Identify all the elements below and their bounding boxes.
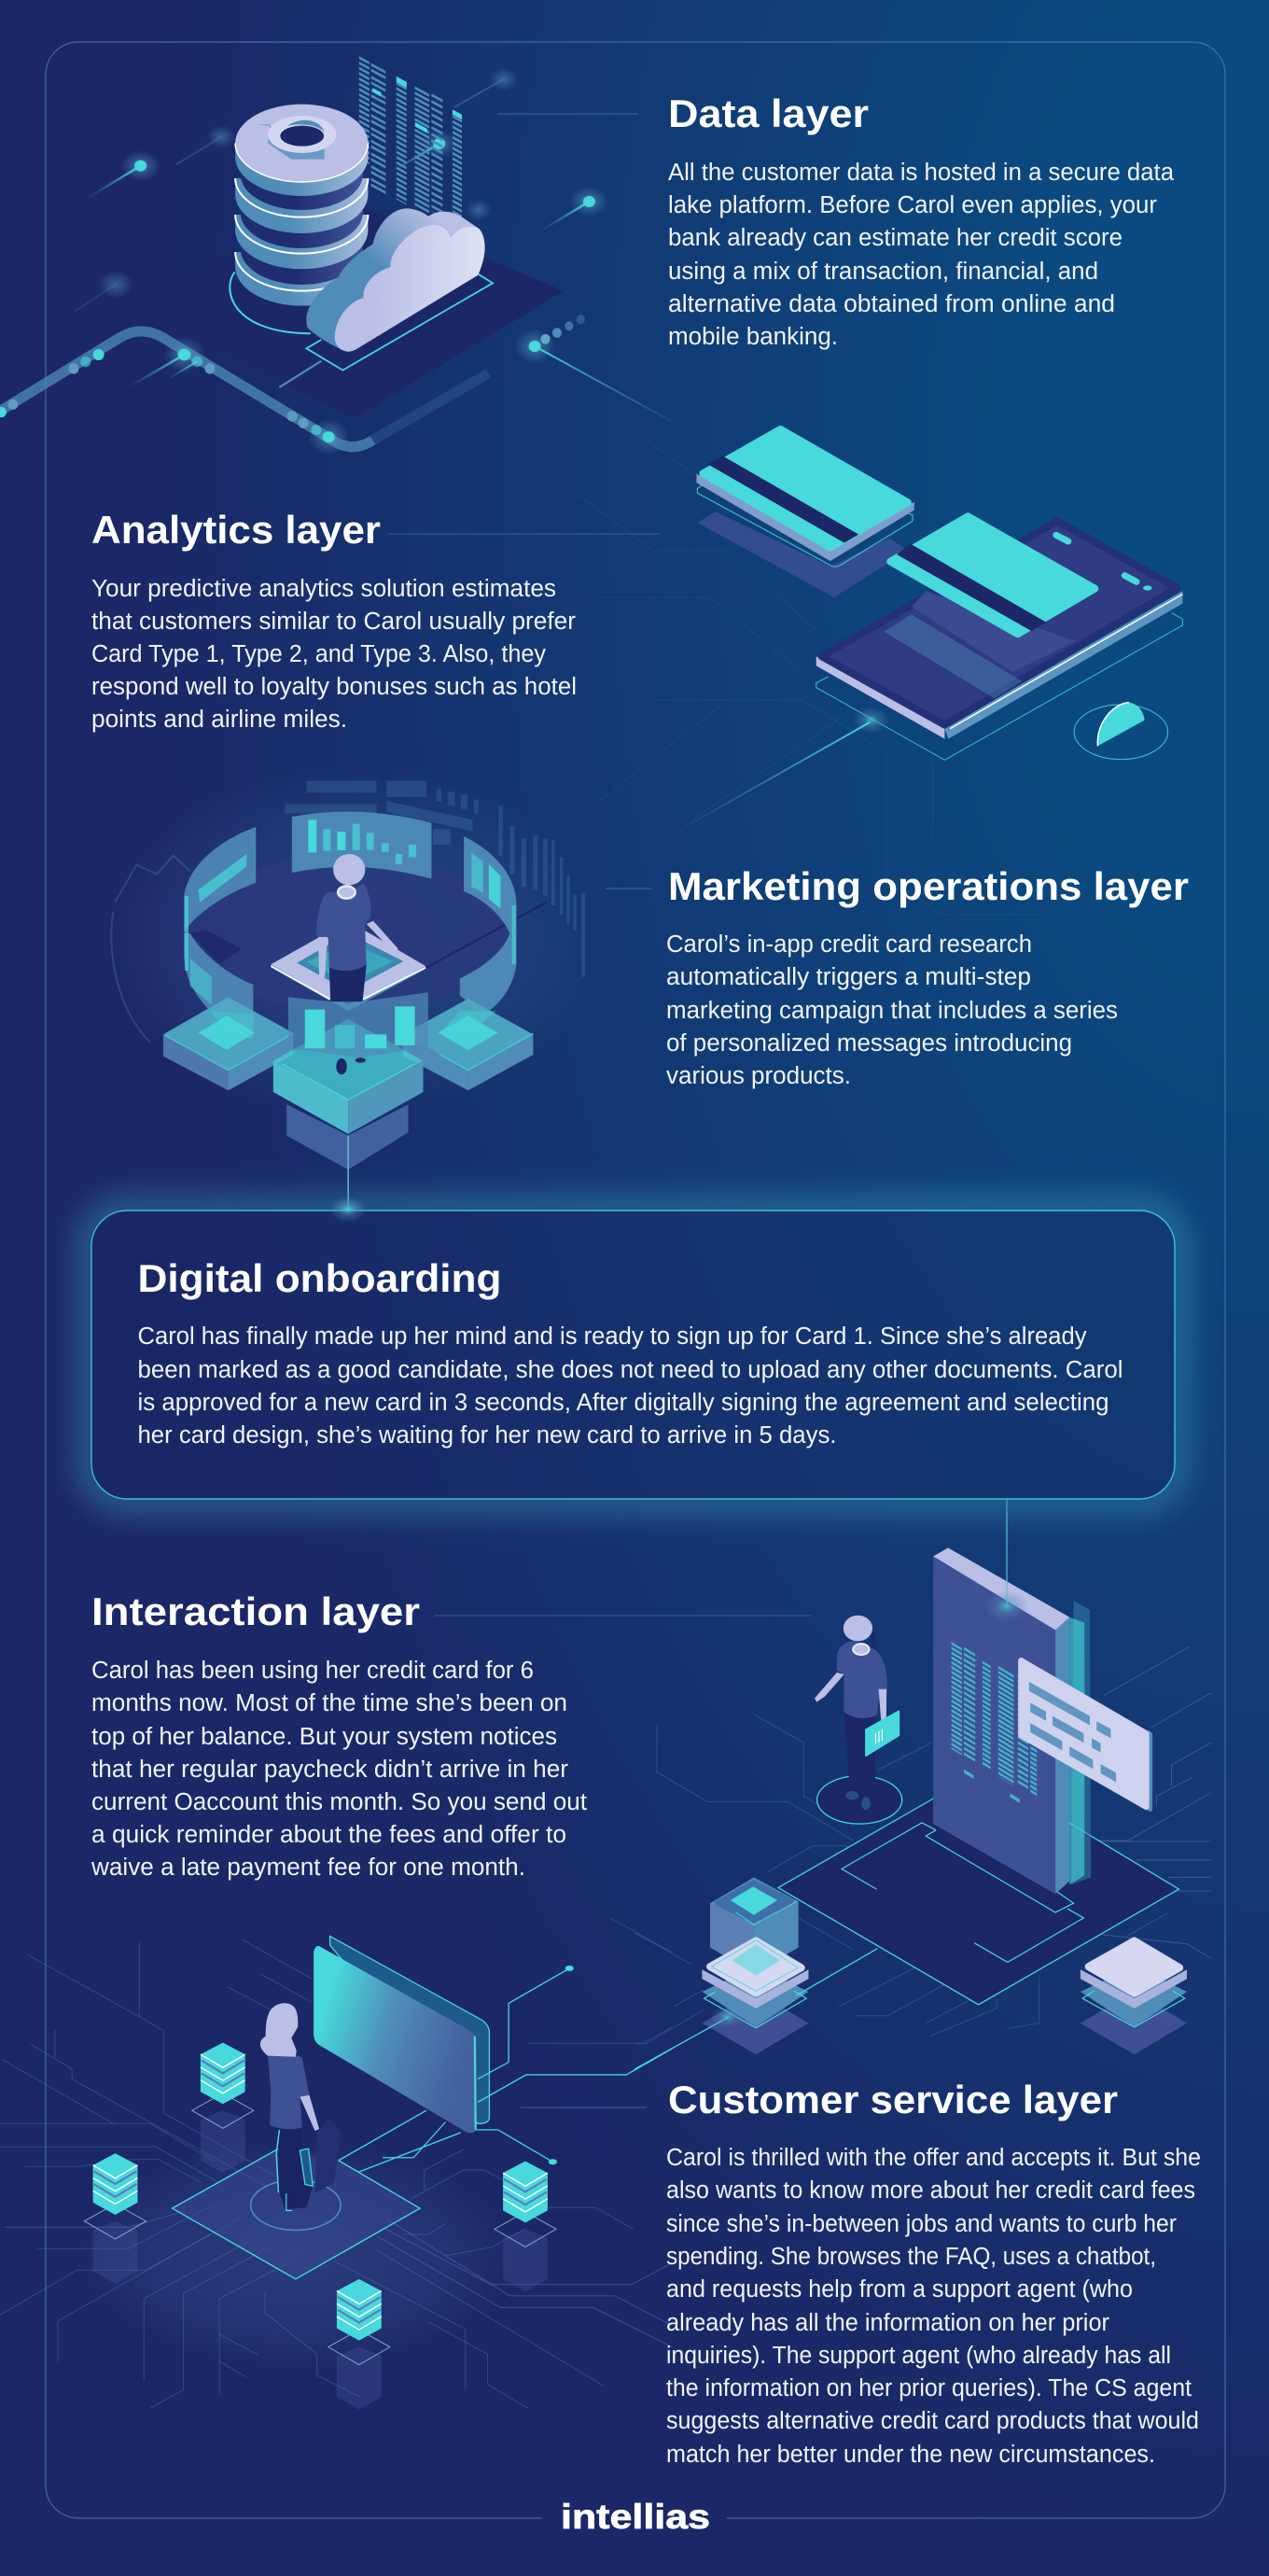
text block: Marketing operations layer [666, 931, 1118, 1089]
person at screen [260, 2003, 341, 2210]
text block: Customer service layer: Carol is thrilled with the offer and accepts it. But she [666, 2145, 1201, 2171]
text block: Customer service layer [666, 2145, 1201, 2468]
text block: Digital onboarding: her card design, she’s waiting for her new card to arrive in 5 days. [138, 1422, 836, 1449]
illustration: customer service figure, screen and stacks [0, 1918, 672, 2410]
panel: digital onboarding [91, 1211, 1175, 1499]
text block: Analytics layer: that customers similar to Carol usually prefer [91, 609, 577, 635]
data stack: back [192, 2042, 254, 2173]
streak from phone glow [672, 722, 870, 834]
data stack: right [495, 2162, 556, 2291]
connector: interaction heading line [435, 1615, 811, 1617]
text block: Data layer [668, 160, 1175, 350]
text block: Data layer: mobile banking. [668, 324, 838, 350]
text block: Interaction layer: Carol has been using her credit card for 6 [91, 1658, 534, 1684]
text block: Interaction layer: that her regular paycheck didn’t arrive in her [91, 1757, 569, 1783]
text block: Customer service layer: suggests alternative credit card products that would [666, 2408, 1199, 2434]
text block: Interaction layer: a quick reminder about the fees and offer to [91, 1822, 566, 1848]
text block: Data layer: bank already can estimate her credit score [668, 225, 1123, 251]
text block: Customer service layer: already has all the information on her prior [666, 2310, 1109, 2336]
text block: Digital onboarding [138, 1323, 1123, 1449]
text block: Interaction layer: months now. Most of the time she’s been on [91, 1690, 567, 1716]
connector: analytics heading line [387, 533, 660, 535]
connector: marketing heading line [606, 888, 652, 889]
text block: Digital onboarding: is approved for a new card in 3 seconds, After digitally signing the agreement and selecting [138, 1390, 1109, 1416]
heading: Marketing operations layer: Marketing operations layer [668, 864, 1189, 908]
text block: Digital onboarding: Carol has finally made up her mind and is ready to sign up for Card 1. Since she’s already [138, 1323, 1087, 1350]
text block: Analytics layer [91, 576, 577, 733]
illustration: credit cards and phone [697, 429, 1182, 760]
connector: customer service heading line [521, 2107, 647, 2108]
text block: Interaction layer: current Oaccount this month. So you send out [91, 1789, 587, 1815]
text block: Marketing operations layer: of personalized messages introducing [666, 1030, 1072, 1057]
text block: Marketing operations layer: various products. [666, 1063, 851, 1089]
text block: Data layer: All the customer data is hosted in a secure data [668, 160, 1175, 186]
heading: Data layer: Data layer [668, 91, 869, 135]
text block: Analytics layer: points and airline miles. [91, 707, 347, 733]
text block: Data layer: using a mix of transaction, financial, and [668, 259, 1098, 285]
text block: Customer service layer: also wants to know more about her credit card fees [666, 2177, 1195, 2204]
data stack: left [84, 2153, 146, 2284]
text block: Customer service layer: since she’s in-between jobs and wants to curb her [666, 2211, 1177, 2237]
text block: Data layer: alternative data obtained from online and [668, 291, 1115, 317]
text block: Data layer: lake platform. Before Carol even applies, your [668, 192, 1158, 218]
text block: Customer service layer: spending. She browses the FAQ, uses a chatbot, [666, 2244, 1156, 2270]
data stack: front [328, 2279, 390, 2410]
text block: Marketing operations layer: marketing campaign that includes a series [666, 998, 1118, 1024]
heading: Customer service layer: Customer service layer [668, 2078, 1118, 2121]
heading: Interaction layer: Interaction layer [91, 1589, 420, 1633]
text block: Marketing operations layer: automatically triggers a multi-step [666, 964, 1031, 990]
heading: Digital onboarding: Digital onboarding [138, 1256, 502, 1300]
text block: Interaction layer [91, 1658, 587, 1881]
text block: Customer service layer: and requests help from a support agent (who [666, 2276, 1133, 2303]
text block: Customer service layer: match her better under the new circumstances. [666, 2442, 1155, 2468]
text block: Analytics layer: respond well to loyalty bonuses such as hotel [91, 674, 577, 700]
illustration: interaction layer phone, person and cubes [634, 1512, 1211, 2069]
heading: Analytics layer: Analytics layer [91, 508, 381, 552]
logo: intellias: intellias [561, 2498, 710, 2536]
connector: onboarding to phone [1006, 1499, 1008, 1607]
text block: Analytics layer: Card Type 1, Type 2, and Type 3. Also, they [91, 641, 546, 667]
text block: Analytics layer: Your predictive analytics solution estimates [91, 576, 556, 602]
faint circuit lines behind phone [579, 439, 1045, 915]
text block: Digital onboarding: been marked as a good candidate, she does not need to upload any other documents. Carol [138, 1357, 1123, 1383]
connector: data layer heading line [497, 113, 638, 115]
illustration: database and cloud [0, 57, 672, 455]
glow: connector node on onboarding panel [329, 1197, 367, 1223]
text block: Interaction layer: waive a late payment fee for one month. [91, 1855, 525, 1881]
text block: Marketing operations layer: Carol’s in-app credit card research [666, 931, 1032, 958]
text block: Customer service layer: inquiries). The support agent (who already has all [666, 2343, 1171, 2369]
text block: Interaction layer: top of her balance. But your system notices [91, 1724, 557, 1750]
illustration: marketing operations figure with curved dashboards [97, 765, 603, 1221]
text block: Customer service layer: the information on her prior queries). The CS agent [666, 2375, 1192, 2401]
